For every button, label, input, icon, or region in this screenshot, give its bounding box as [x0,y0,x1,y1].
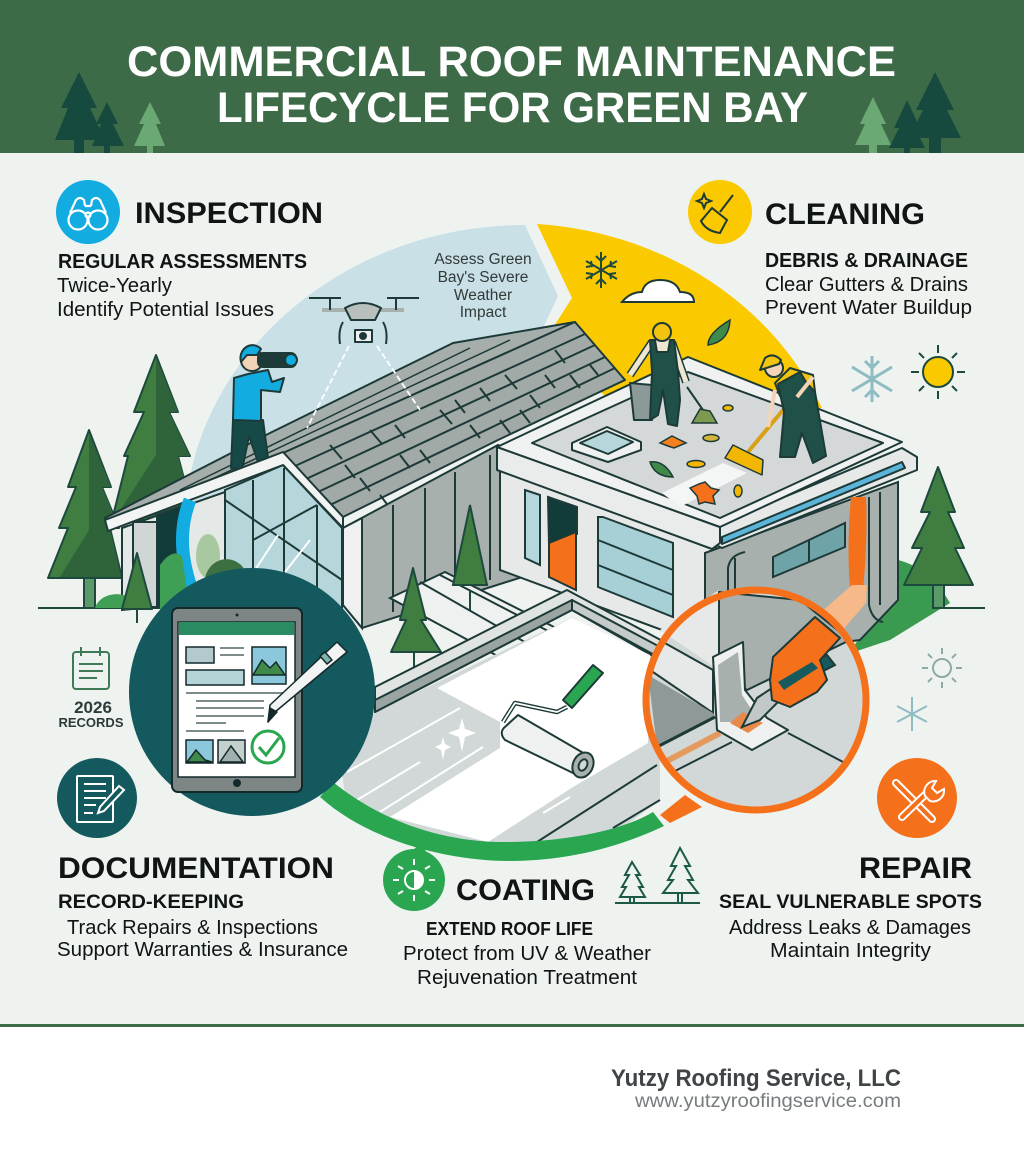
shingle roof [283,322,625,517]
small sun faint [922,648,962,688]
hard hat [653,323,671,341]
records label: 2026 [74,698,112,717]
footer brand: Yutzy Roofing Service, LLC [611,1065,901,1092]
lower coating roof [340,590,670,855]
documentation text block: Support Warranties & Insurance [57,939,348,961]
inspection text block: INSPECTION [135,197,323,230]
sun right [911,345,965,399]
cleaning icon [688,180,752,244]
inspection blue sector [185,225,558,520]
tablet text lines [186,648,283,731]
gable trim [105,452,343,531]
conical tree by wall [453,505,487,610]
cycle arc: orange [848,497,866,600]
title [127,38,896,132]
repair text block: SEAL VULNERABLE SPOTS [719,892,982,913]
back slope shingle lines [180,340,510,490]
assess weather note [434,251,532,321]
check badge [252,731,284,763]
drone [309,298,419,344]
documentation text block [57,852,348,961]
coating text block: Protect from UV & Weather [403,943,651,965]
front edge lines [537,765,660,842]
documentation icon [57,758,137,838]
cleaning yellow sector [537,224,822,410]
worker body [233,370,284,421]
documentation text block: Track Repairs & Inspections [67,917,318,939]
leaves on roof [650,320,742,504]
right pine tree [904,467,973,608]
ground lines [38,607,985,609]
bucket [630,383,652,420]
shirt [775,368,815,396]
base lines and orange seal [657,717,715,747]
blade [742,688,780,727]
inspection text block: Identify Potential Issues [57,299,274,321]
footer brand: www.yutzyroofingservice.com [634,1091,901,1112]
header banner [0,0,1024,153]
records label [58,698,124,730]
records label: RECORDS [58,715,124,730]
blue arc over wall [182,500,192,590]
documentation text block: DOCUMENTATION [58,852,334,885]
tablet [172,608,302,792]
cleaning text block: Prevent Water Buildup [765,297,972,319]
inspection worker [231,345,297,470]
parapet [497,357,902,527]
repair magnifier circle [646,585,867,810]
roof deck [532,372,883,518]
worker head [241,349,263,371]
arms [630,342,686,382]
inspection text block: Twice-Yearly [57,275,172,297]
side wall with panels [343,445,560,628]
footer rule [0,1024,1024,1027]
repair text block [719,852,982,962]
orange arrow tag [660,795,702,823]
small snowflake faint [897,697,927,731]
paint roller [502,665,603,781]
white coated area [390,618,650,842]
chest [652,340,672,372]
inspection icon [56,180,120,244]
worker legs [231,420,268,470]
binoculars [258,353,296,367]
walkway steps [390,572,560,660]
cleaning text block: DEBRIS & DRAINAGE [765,250,968,272]
cleaning text block: Clear Gutters & Drains [765,274,968,296]
overalls [778,372,826,463]
dark lower wall [648,675,715,747]
coating text block: COATING [456,874,595,907]
repair text block: Address Leaks & Damages [729,917,971,939]
cloud [622,280,694,302]
cleaning text block: CLEANING [765,198,925,231]
gray wall in magnifier [719,592,850,690]
flashing [713,642,788,750]
snowflake on yellow [586,252,617,288]
assess weather note: Assess Green [434,251,532,268]
tablet widgets [186,647,286,763]
sweeping broom small [687,387,703,410]
swept clean strip [662,463,747,507]
handle over glove [778,662,818,690]
pine tree large left [112,355,195,520]
coating icon [383,842,445,911]
drone scan beams [307,346,420,428]
pine tree left [48,430,122,608]
small pine by gable [122,553,152,623]
footer brand [611,1065,901,1112]
cleaning worker right [760,355,826,463]
title: LIFECYCLE FOR GREEN BAY [217,84,808,132]
parapet band in magnifier [650,642,713,713]
coating text block: Rejuvenation Treatment [417,967,637,989]
gutter [706,448,917,548]
sparkles [435,718,476,760]
assess weather note: Bay's Severe [438,269,528,286]
fascia [497,447,720,549]
glove [770,617,840,707]
coating text block [403,874,651,989]
title: COMMERCIAL ROOF MAINTENANCE [127,38,896,86]
cycle arc: green [320,782,664,861]
gray deck [340,618,660,855]
calendar icon [73,647,109,689]
wall upper left in magnifier [660,590,719,670]
coating streaks [347,708,570,813]
flat-roof building walls [500,470,898,660]
coating text block: EXTEND ROOF LIFE [426,919,593,939]
coating parapet [375,590,670,712]
bushes [95,534,248,610]
skylight [572,427,641,462]
assess weather note: Weather [454,287,512,304]
magnifier ring [646,590,866,810]
arm [820,585,867,633]
assess weather note: Impact [460,304,507,321]
head [765,359,783,377]
walkway lines [420,575,550,645]
cleaning worker left [630,323,686,426]
documentation text block: RECORD-KEEPING [58,892,244,913]
handle [777,655,835,693]
stylus [268,642,347,722]
arm [768,377,813,427]
inspection text block [57,197,323,321]
right ground bush [848,560,950,654]
seal patch [730,712,763,733]
documentation tablet circle [129,568,375,816]
overalls [650,340,680,426]
roof back slope [105,322,575,524]
gable wall and glazing [122,465,342,620]
coating small trees [615,848,700,903]
repair text block: REPAIR [859,852,972,885]
header trees right [855,72,961,153]
repair icon [877,758,957,838]
repair text block: Maintain Integrity [770,940,931,962]
header trees left [55,72,165,153]
flat roof [497,357,917,549]
downspouts [728,492,883,622]
cleaning text block [765,198,972,319]
front pine [391,568,441,668]
push broom [725,398,793,475]
snowflake right [852,356,892,402]
inspection text block: REGULAR ASSESSMENTS [58,251,307,273]
